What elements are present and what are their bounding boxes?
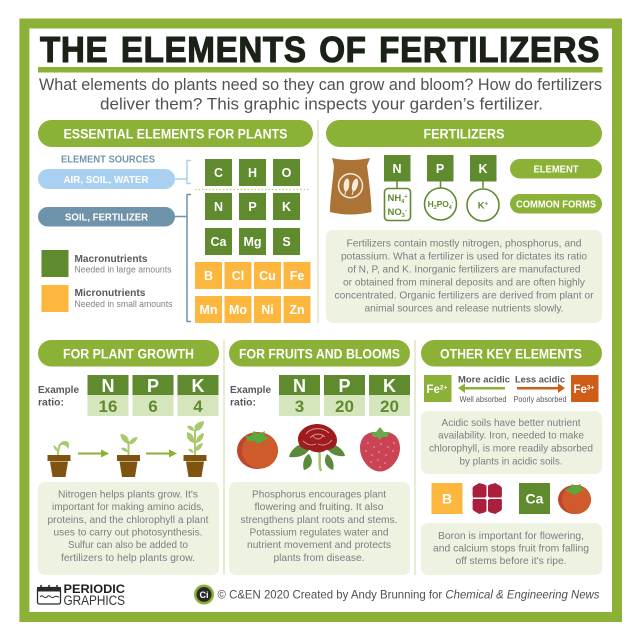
source: air soil water xyxy=(38,160,191,189)
source: soil fertilizer xyxy=(38,194,191,322)
key: element: ELEMENT xyxy=(534,164,578,176)
panel: for fruits and blooms xyxy=(229,340,410,575)
panel: fertilizers xyxy=(326,120,602,323)
heading: plant growth: FOR PLANT GROWTH xyxy=(63,346,194,362)
icon: young plant pot xyxy=(117,434,140,477)
column dividers xyxy=(223,120,416,575)
text block: plant growth: uses to carry out photosynthesis. xyxy=(54,528,202,538)
nitrogen with common forms: 4 xyxy=(401,199,405,205)
panel: for plant growth xyxy=(38,340,219,575)
heading: essential elements: ESSENTIAL ELEMENTS FOR PLANTS xyxy=(64,126,288,142)
potassium with common forms: K xyxy=(478,162,488,176)
text block: iron: by plants in acidic soils. xyxy=(460,456,562,468)
tile: boron xyxy=(432,483,462,514)
tile: calcium xyxy=(519,483,550,514)
text block: fertilizers: Fertilizers contain mostly nitrogen, phosphorus, and xyxy=(346,238,582,250)
text block: plant growth: proteins, and the chlorophyll a plant xyxy=(48,515,209,526)
ratio table 16-6-4: 4 xyxy=(193,397,203,416)
iron acidity arrows: More acidic xyxy=(458,374,510,386)
nitrogen with common forms: N xyxy=(392,162,402,176)
example ratio label: Example xyxy=(230,384,271,396)
text block: fruits and blooms: Phosphorus encourages plant xyxy=(252,490,386,500)
text block: iron: chlorophyll, is more readily absorbed xyxy=(429,444,593,454)
icon: fertilizer bag xyxy=(330,158,372,214)
macronutrient tiles: N xyxy=(214,200,223,214)
text block: fertilizers xyxy=(326,230,602,323)
example ratio label: Example xyxy=(38,384,79,396)
ratio table 3-20-20: N xyxy=(293,376,306,396)
heading: plant growth xyxy=(38,340,219,366)
heading: other key elements: OTHER KEY ELEMENTS xyxy=(440,346,582,362)
tile: Fe2+: Fe xyxy=(426,384,440,396)
ratio table 3-20-20: 20 xyxy=(335,397,354,416)
legend: macronutrients: Macronutrients xyxy=(74,254,148,265)
iron acidity arrows xyxy=(458,374,567,404)
iron acidity arrows: Poorly absorbed xyxy=(514,394,567,404)
panel: other key elements xyxy=(421,340,602,575)
text block: plant growth: Sulfur can also be added to xyxy=(68,540,188,551)
micronutrient tiles: Ni xyxy=(261,303,274,317)
icon: tomato xyxy=(237,431,278,469)
heading: fertilizers xyxy=(326,120,602,147)
text block: boron and calcium: Boron is important for flowering, xyxy=(438,531,584,542)
tile: Fe2+ xyxy=(424,375,452,402)
title: THE ELEMENTS OF FERTILIZERS xyxy=(40,29,600,70)
micronutrient tiles: Mn xyxy=(199,303,218,317)
phosphorus with common forms: P xyxy=(436,162,444,176)
key: common forms: COMMON FORMS xyxy=(516,200,596,210)
text block: fertilizers: animal sources and release nutrients slowly. xyxy=(364,304,564,314)
example ratio label: ratio: xyxy=(230,396,256,408)
intro text: What elements do plants need so they can grow and bloom? How do fertilizers xyxy=(39,76,602,94)
macronutrient tiles: S xyxy=(282,235,291,249)
phosphorus with common forms: PO xyxy=(437,199,449,209)
micronutrient tiles xyxy=(195,262,310,323)
element sources label: ELEMENT SOURCES xyxy=(61,154,155,166)
legend: micronutrients xyxy=(42,285,173,312)
panel: essential elements for plants xyxy=(38,120,313,323)
legend: micronutrients: Needed in small amounts xyxy=(74,299,173,309)
example ratio label xyxy=(230,384,271,408)
text block: fertilizers: potassium. What a fertilizer is used for dictates its ratio xyxy=(341,252,587,262)
text block: iron: availability. Iron, needed to make xyxy=(438,430,584,442)
potassium with common forms: + xyxy=(485,202,489,208)
text block: plant growth: fertilizers to help plants grow. xyxy=(61,553,195,564)
tile: Fe3+ xyxy=(571,375,598,402)
tile: Fe3+: Fe xyxy=(574,384,587,396)
macronutrient tiles: O xyxy=(282,166,292,180)
macronutrient tiles: H xyxy=(248,166,257,180)
nitrogen with common forms: + xyxy=(404,194,408,200)
iron acidity arrows: Less acidic xyxy=(515,374,565,386)
text block: plant growth: Nitrogen helps plants grow. It's xyxy=(58,490,198,500)
micronutrient tiles: Cu xyxy=(259,269,276,283)
heading: fruits and blooms: FOR FRUITS AND BLOOMS xyxy=(239,346,400,362)
micronutrient tiles: Fe xyxy=(290,269,304,283)
phosphorus with common forms: 2 xyxy=(434,205,437,211)
example ratio label: ratio: xyxy=(38,396,64,408)
dotted separator xyxy=(195,188,310,190)
icon: seedling pot xyxy=(48,441,70,477)
ratio table 16-6-4 xyxy=(88,375,218,416)
text block: fruits and blooms: nutrient movement and protects xyxy=(247,540,391,551)
tile: Fe3+: 3+ xyxy=(587,384,595,392)
nitrogen with common forms xyxy=(384,155,410,220)
nitrogen with common forms: 3 xyxy=(402,213,405,219)
key: common forms xyxy=(510,194,602,214)
arrow: growth 1 xyxy=(78,450,109,458)
legend: macronutrients xyxy=(42,250,172,277)
text block: iron xyxy=(421,411,602,474)
micronutrient tiles: Mo xyxy=(229,303,247,317)
C&EN logo xyxy=(194,584,214,604)
arrow: growth 2 xyxy=(146,450,177,458)
intro text: deliver them? This graphic inspects your garden’s fertilizer. xyxy=(100,96,543,114)
macronutrient tiles: Mg xyxy=(243,235,262,249)
text block: fertilizers: concentrated. Organic fertilizers are derived from plant or xyxy=(334,290,594,302)
phosphorus with common forms: - xyxy=(452,200,454,206)
text block: boron and calcium: off stems before it's ripe. xyxy=(456,556,566,567)
micronutrient tiles: Zn xyxy=(289,303,305,317)
source: soil fertilizer: SOIL, FERTILIZER xyxy=(65,212,149,224)
heading: essential elements xyxy=(38,120,313,147)
text block: fertilizers: or obtained from mineral deposits and are often highly xyxy=(343,278,586,288)
ratio table 16-6-4: N xyxy=(102,376,114,396)
phosphorus with common forms: 4 xyxy=(449,205,452,211)
heading: other key elements xyxy=(421,340,602,366)
text block: iron: Acidic soils have better nutrient xyxy=(442,418,581,429)
nitrogen with common forms: NH xyxy=(388,193,401,204)
C&EN logo: Ci xyxy=(200,590,208,600)
key: element xyxy=(510,159,602,178)
phosphorus with common forms xyxy=(424,155,456,220)
micronutrient tiles: B xyxy=(204,269,213,283)
icon: tomato xyxy=(558,484,591,514)
nitrogen with common forms: NO xyxy=(388,207,402,218)
text block: plant growth: important for making amino acids, xyxy=(52,502,204,513)
tile: boron: B xyxy=(442,490,452,506)
potassium with common forms xyxy=(467,155,499,221)
ratio table 16-6-4: 6 xyxy=(148,397,158,416)
credit line: © C&EN 2020 Created by Andy Brunning for Chemical & Engineering News xyxy=(218,588,600,602)
ratio table 16-6-4: P xyxy=(147,376,159,396)
periodic graphics logo: PERIODIC xyxy=(64,582,125,596)
nitrogen with common forms: - xyxy=(405,208,407,214)
text block: plant growth xyxy=(38,482,219,575)
macronutrient tiles: K xyxy=(282,200,291,214)
periodic graphics logo: GRAPHICS xyxy=(64,593,125,608)
ratio table 16-6-4: 16 xyxy=(99,397,117,416)
text block: fruits and blooms: Potassium regulates water and xyxy=(250,528,389,538)
micronutrient tiles: Cl xyxy=(232,269,244,283)
ratio table 3-20-20 xyxy=(279,375,410,416)
intro text xyxy=(39,76,602,114)
legend: micronutrients: Micronutrients xyxy=(74,288,146,299)
text block: boron and calcium xyxy=(421,523,602,575)
ratio table 3-20-20: P xyxy=(338,376,351,396)
macronutrient tiles: P xyxy=(248,200,257,214)
ratio table 3-20-20: 3 xyxy=(295,397,304,416)
ratio table 16-6-4: K xyxy=(192,376,204,396)
text block: boron and calcium: and calcium stops fruit from falling xyxy=(433,544,589,554)
icon: flower xyxy=(472,483,502,514)
tile: calcium: Ca xyxy=(526,490,544,506)
macronutrient tiles xyxy=(205,159,300,255)
source: air soil water: AIR, SOIL, WATER xyxy=(64,174,149,186)
heading: fruits and blooms xyxy=(229,340,410,366)
ratio table 3-20-20: 20 xyxy=(380,397,399,416)
macronutrient tiles: C xyxy=(214,166,223,180)
text block: fertilizers: of N, P, and K. Inorganic fertilizers are manufactured xyxy=(348,264,581,276)
phosphorus with common forms: H xyxy=(428,199,434,209)
icon: strawberry xyxy=(360,427,400,472)
example ratio label xyxy=(38,384,79,408)
iron acidity arrows: Well absorbed xyxy=(460,394,507,404)
text block: fruits and blooms: flowering and fruiting. It also xyxy=(254,502,384,513)
text block: fruits and blooms: strengthens plant roots and stems. xyxy=(240,515,398,526)
heading: fertilizers: FERTILIZERS xyxy=(424,126,504,142)
text block: fruits and blooms: plants from disease. xyxy=(274,553,364,564)
icon: mature plant pot xyxy=(184,421,206,477)
potassium with common forms: K xyxy=(478,200,485,212)
ratio table 3-20-20: K xyxy=(383,376,396,396)
legend: macronutrients: Needed in large amounts xyxy=(74,264,172,274)
tile: Fe2+: 2+ xyxy=(440,384,448,392)
periodic graphics logo xyxy=(37,582,125,608)
text block: fruits and blooms xyxy=(229,482,410,575)
macronutrient tiles: Ca xyxy=(211,235,228,249)
icon: rose xyxy=(289,424,345,471)
